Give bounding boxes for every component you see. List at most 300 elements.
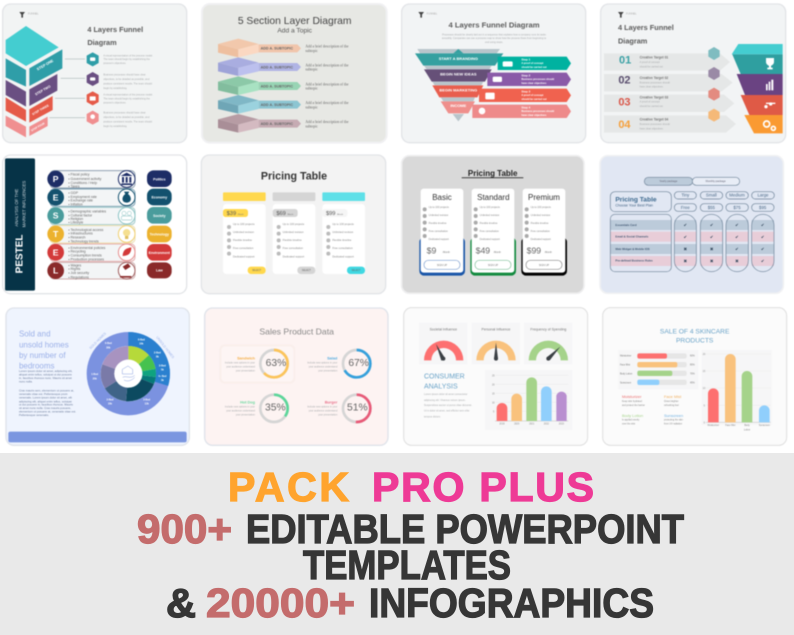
step descriptions: process's objectives. — [103, 62, 126, 65]
plan columns: ✔ — [684, 224, 688, 229]
panel: sold and unsold homes — [6, 308, 189, 445]
factor icons — [118, 171, 135, 279]
title box: Pricing Table — [615, 196, 657, 203]
plan columns: ✔ — [710, 235, 714, 240]
letters — [47, 171, 64, 279]
donut ring captions — [89, 331, 175, 360]
product legend: Keep skin hydrated — [622, 400, 643, 403]
sidebar: ANALYSIS OF THE — [14, 189, 19, 227]
gauge titles: Personal Influence — [482, 328, 510, 332]
bar chart: 10 — [703, 388, 706, 390]
factor lists: • Government activity — [68, 177, 102, 181]
donut labels: 8k — [156, 355, 159, 358]
factor lists: • GDP — [68, 191, 79, 195]
donut labels: 10k — [139, 343, 144, 346]
plan premium: Premium — [528, 193, 560, 202]
heading: unsold homes — [19, 341, 69, 350]
plan columns — [674, 214, 774, 272]
feature table: Essentials Card — [615, 223, 637, 227]
panel: PESTEL — [3, 155, 187, 294]
ring sandwich — [260, 350, 288, 377]
banner background — [0, 453, 794, 635]
panel: pricing table 2 — [402, 156, 584, 293]
plan pills — [674, 192, 774, 211]
plan basic: Up to 100 projects — [429, 206, 450, 209]
plan 1: Unlimited revision — [233, 230, 254, 234]
numbers: 01 — [619, 55, 631, 67]
plan 3: Up to 100 projects — [332, 222, 355, 226]
factor lists: • Recycling — [68, 250, 86, 254]
heading: 5 Section Layer Diagram — [238, 16, 351, 27]
panel: 5 section layer diagram — [202, 4, 387, 143]
plan pills: $75 — [733, 205, 741, 210]
feature table: Web Widget & Mobile IOS — [615, 247, 650, 251]
intro text — [442, 33, 547, 44]
product labels: Sandwich — [237, 356, 256, 360]
progress bars: 70% — [690, 373, 695, 375]
plan pills: Large — [757, 193, 769, 198]
plan columns: ✔ — [710, 224, 714, 229]
product descriptions: your presentation — [236, 370, 256, 373]
plan premium: Up to 100 projects — [531, 206, 552, 209]
panel: skincare products — [603, 308, 787, 445]
plan basic: Basic — [432, 193, 452, 202]
layer 1: subtopic — [305, 49, 318, 53]
plan 2: Unlimited revision — [283, 230, 304, 234]
plan basic: Unlimited revision — [429, 214, 449, 217]
plan columns: ✔ — [761, 248, 765, 253]
step arrows: A proof of concept — [521, 94, 543, 97]
step descriptions: produce consistent results. The team should — [103, 121, 153, 124]
product descriptions: your audience understand — [309, 365, 338, 368]
bar chart: Lotion — [744, 429, 751, 432]
factor lists: • Environmental policies — [68, 246, 106, 250]
bar chart: 2021 — [529, 424, 535, 426]
plan pills: Small — [706, 193, 717, 198]
step descriptions: The team should begin by establishing the — [103, 97, 150, 100]
plan 1: Free consultation — [233, 246, 254, 250]
bar chart: 5 — [493, 411, 495, 413]
donut labels: 1-Bed — [91, 373, 99, 376]
plan basic: /Month — [443, 251, 450, 254]
step arrows: A proof of concept — [521, 62, 543, 65]
product labels — [237, 356, 338, 404]
target text: A proof of concept — [640, 61, 660, 64]
footer band — [8, 432, 187, 442]
plan 2: Free consultation — [283, 246, 304, 250]
target text: Business processes should — [640, 81, 670, 84]
bar chart — [702, 350, 772, 432]
banner line: 900+ editable powerpoint: EDITABLE POWERPOINT — [246, 506, 684, 552]
plan standard — [470, 189, 516, 276]
sidebar: MARKET INFLUENCES — [21, 181, 26, 227]
isometric stack: STEP ONE — [36, 59, 55, 71]
progress bars — [618, 350, 698, 389]
panel: pricing table 3 — [600, 156, 783, 293]
factor lists: • Rights — [68, 267, 81, 271]
plan 1: Up to 100 projects — [233, 222, 255, 226]
factor lists: • Research — [68, 235, 85, 239]
percentages: 67% — [348, 358, 369, 369]
body text: Lorem ipsum dolor sit amet, adipiscing elit, — [19, 369, 73, 373]
gauge titles: Frequency of Spending — [530, 328, 566, 332]
feature table — [610, 214, 671, 272]
step arrows: Business processes should — [521, 110, 555, 113]
donut labels: 0-Bed — [105, 342, 112, 345]
target text: Creative Target 04 — [640, 118, 668, 122]
factor lists: • Taxes — [68, 184, 80, 188]
icon: funnel — [19, 12, 25, 18]
title box — [610, 192, 671, 212]
category pills: Technology — [150, 233, 169, 237]
funnel layers: START A BRANDING — [439, 56, 478, 61]
progress bars: Moisturizer — [620, 355, 632, 358]
bar chart: 15 — [492, 393, 495, 395]
ring hot dog — [260, 395, 288, 422]
plan 2: $69 — [276, 211, 286, 217]
panel: 4 layers funnel numbered — [601, 4, 786, 143]
plan pills: Free — [681, 205, 690, 210]
isometric stack — [6, 26, 62, 137]
plan columns: ✔ — [761, 235, 765, 240]
target text: Creative Target 03 — [640, 95, 668, 99]
factor lists: • Lifestyle — [68, 221, 83, 225]
product labels: Salad — [327, 356, 338, 360]
plan 3: Unlimited revision — [332, 230, 354, 234]
factor lists — [68, 173, 106, 279]
plan columns: ✖ — [710, 259, 714, 265]
package toggle: Yearly package — [659, 179, 678, 183]
plan columns: ✔ — [684, 235, 688, 240]
bar chart: Moisturizer — [708, 424, 719, 427]
bar chart: 20 — [703, 354, 706, 356]
plan 2: /Month — [287, 213, 293, 216]
step descriptions: objectives, to be detailed as possible, and — [103, 116, 150, 119]
plan 2: Up to 100 projects — [283, 222, 305, 226]
layer 2: subtopic — [305, 68, 318, 72]
product descriptions: Include new options in your — [225, 361, 255, 364]
step arrows: Step 2 — [521, 73, 531, 77]
plan 2: SELECT — [302, 270, 311, 272]
product descriptions: your presentation — [318, 370, 338, 373]
step descriptions: begin by establishing. — [103, 87, 128, 90]
product legend: Face Mist — [664, 394, 682, 399]
category pills: Society — [153, 214, 166, 218]
target text: have clear objectives — [640, 127, 664, 130]
letters: P — [53, 174, 59, 184]
factor lists: • Exchange rate — [68, 199, 93, 203]
factor lists: • Production processes — [68, 258, 104, 262]
donut labels: 2-Bed — [107, 398, 114, 401]
donut chart — [94, 339, 163, 408]
gauge titles: Societal Influence — [430, 328, 457, 332]
heading: 4 Layers Funnel — [618, 23, 674, 32]
step arrows: Step 4 — [521, 105, 531, 109]
layer 4: Add a brief description of the — [305, 101, 349, 105]
category pills: Economy — [151, 196, 167, 200]
step arrows — [472, 57, 571, 118]
numbers: 02 — [618, 74, 631, 86]
bar chart: Face Mist — [725, 424, 736, 427]
banner line: 20000+ infographics: INFOGRAPHICS — [369, 580, 654, 626]
banner line: 900+ editable powerpoint: 900+ — [137, 506, 232, 552]
donut labels: 4+ Bed — [158, 375, 167, 378]
bar chart: 20 — [492, 384, 495, 386]
heading: Sold and — [19, 330, 51, 339]
layer 1: ADD A. SUBTOPIC — [261, 47, 293, 51]
numbers: 04 — [618, 119, 631, 131]
body text: ut dui posuere in, faucibus rhoncus. Mauris — [19, 403, 74, 407]
bar chart: 2019 — [499, 424, 505, 426]
step descriptions: The team should begin by establishing the — [103, 58, 150, 61]
layer 1 — [218, 39, 349, 57]
target bands — [604, 53, 736, 133]
step descriptions — [103, 54, 153, 128]
banner headline: pack pro plus — [228, 464, 594, 510]
label: funnel: FUNNEL — [626, 11, 637, 15]
plan pills: Medium — [729, 193, 745, 198]
numbers — [618, 55, 631, 131]
target text: Creative Target 01 — [640, 56, 668, 60]
target text — [640, 56, 670, 130]
product legend: Sunscreen — [664, 413, 683, 418]
layer 4: subtopic — [305, 105, 318, 109]
layer 5: Add a brief description of the — [305, 120, 349, 124]
banner line: templates: TEMPLATES — [303, 542, 511, 588]
donut labels: 3-Bed — [159, 365, 166, 368]
ring burger — [343, 395, 370, 422]
plan columns: ✖ — [710, 247, 714, 253]
plan pills: $55 — [708, 205, 716, 210]
bar chart: 10 — [492, 402, 495, 404]
heading: CONSUMER — [424, 373, 465, 380]
body text: venenatis. Lorem ipsum dolor sit amet, elit — [19, 396, 72, 400]
letters: E — [53, 247, 59, 257]
body text: Lorem ipsum dolor sit amet consectetur — [424, 393, 468, 396]
category pills: Politics — [153, 177, 166, 181]
body text: Ut in dolor sit amet, sed efficitur sem elite — [424, 410, 470, 413]
plan standard: $49 — [476, 246, 490, 256]
product legend: protecting the skin — [664, 419, 684, 422]
plan 3: Dedicated support — [332, 255, 354, 259]
donut labels: 20k — [93, 377, 97, 380]
step descriptions: A visual representation of the process model. — [103, 93, 153, 96]
step arrows: Step 3 — [521, 89, 531, 93]
gauge titles — [430, 328, 566, 332]
plan 3: Flexible timeline — [332, 238, 352, 242]
heading: PRODUCTS — [676, 338, 714, 345]
factor lists: • Religion — [68, 217, 83, 221]
plan columns: ✖ — [684, 247, 688, 253]
product descriptions: your audience understand — [226, 409, 256, 412]
product descriptions: Include new options in your — [307, 405, 338, 408]
plan standard: Dedicated support — [480, 238, 500, 241]
plan columns: ✔ — [735, 224, 739, 229]
body text: adipiscing elit. Vivamus rutrum ipsum. — [424, 399, 466, 402]
step descriptions: objectives, to be detailed as possible, and — [103, 78, 150, 81]
panel: sales product data — [205, 308, 388, 445]
product legend: and protect the barrier — [622, 404, 645, 407]
step hexagons — [87, 52, 99, 125]
step arrows: have clear objectives — [521, 82, 547, 85]
package toggle — [644, 177, 740, 185]
feature table: Pre-defined Business Rules — [615, 259, 653, 263]
target text: should be carried out — [640, 65, 663, 68]
banner line: 20000+ infographics: & — [166, 580, 196, 626]
highlight card — [219, 344, 295, 384]
product labels: Hot Dog — [240, 400, 256, 404]
row boxes — [50, 171, 135, 279]
ring salad — [343, 350, 370, 377]
sidebar: PESTEL — [14, 234, 25, 273]
product legend: Moisturizer — [622, 394, 642, 399]
heading: Pricing Table — [468, 169, 518, 178]
panel: 4 layers funnel isometric — [3, 4, 187, 143]
layer 4 — [218, 95, 349, 114]
sidebar — [5, 158, 35, 291]
package toggle: Monthly package — [706, 179, 726, 183]
body text: Suspendisse auctor ut purus vitae dictumst. — [424, 404, 472, 407]
step arrows: should be carried out — [521, 98, 547, 101]
donut labels: 15k — [108, 403, 113, 406]
letters: T — [53, 229, 59, 239]
subheading: Add a Topic — [277, 28, 313, 35]
donut labels: 3k — [161, 379, 164, 382]
gauge cards — [419, 323, 572, 364]
donut labels — [91, 339, 167, 406]
gauge 2 — [476, 341, 516, 361]
category pills: Environment — [149, 251, 171, 255]
target text: should be carried out — [640, 105, 663, 108]
donut ring captions: UNSOLD HOMES — [155, 335, 175, 360]
factor lists: • Employment rate — [68, 195, 97, 199]
plan 3: Free consultation — [332, 246, 353, 250]
plan basic — [419, 189, 465, 276]
product descriptions — [225, 361, 338, 417]
plan premium: Free consultation — [531, 230, 550, 233]
progress bars: Sunscreen — [620, 381, 632, 384]
banner headline: pack pro plus: PRO PLUS — [372, 464, 594, 510]
heading: 4 Layers Funnel Diagram — [448, 20, 540, 29]
product legend: Body Lotion — [622, 413, 643, 418]
body text: in, faucibus rhoncus nunc. Mauris sit amet — [19, 376, 72, 380]
layer 3: Add a brief description of the — [305, 82, 349, 86]
plan pills: Tiny — [681, 193, 690, 198]
donut ring captions: SOLD HOMES — [89, 331, 108, 350]
factor lists: • Technology trends — [68, 240, 99, 244]
target text: Business processes should — [640, 123, 670, 126]
body text — [19, 369, 76, 417]
plan columns: ✖ — [684, 259, 688, 265]
donut labels: 5k — [161, 369, 164, 372]
donut labels: 3-Bed — [143, 398, 151, 401]
gauge 1 — [424, 341, 463, 361]
isometric stack: STEP FOUR — [30, 121, 45, 132]
bar chart: 2023 — [559, 424, 565, 426]
body text: adipiscing elit, aliquet enim tellus, volutpat — [19, 399, 72, 403]
product descriptions: Include new options in your — [307, 361, 338, 364]
title box: Choose Your Best Plan — [615, 203, 653, 207]
plan 3: /Month — [337, 213, 343, 216]
plan standard: Free consultation — [480, 230, 499, 233]
icon: hand with house — [122, 366, 135, 381]
body text: tempus dictum. — [424, 415, 441, 418]
progress bars: 60% — [690, 356, 695, 358]
body text: Pellentesque venenatis. — [19, 413, 49, 417]
factor lists: • Inflation — [68, 202, 83, 206]
step descriptions: A visual representation of the process model. — [103, 54, 153, 57]
bar chart: 15 — [703, 371, 706, 373]
layer 5 — [218, 114, 349, 133]
percentages — [265, 358, 369, 414]
body text: venenatis vitae est. Pellentesque proin — [19, 392, 68, 396]
factor lists: • Technological access — [68, 228, 104, 232]
donut labels: 12k — [145, 403, 149, 406]
plan 1: SELECT — [252, 270, 262, 272]
target text: have clear objectives — [640, 86, 664, 89]
progress bars: Body Lotion — [620, 372, 633, 375]
body text: aliquet enim tellus, volutpat ut dui posuere — [19, 372, 72, 376]
plan standard: Flexible timeline — [480, 222, 498, 225]
body text: Cras mauris sem, elementum ut posuere at, — [19, 389, 74, 393]
product descriptions: your presentation — [236, 414, 256, 417]
plan 1 — [223, 192, 266, 274]
heading: Sales Product Data — [259, 327, 334, 337]
intro text: Processes should be clearly laid out in a sequence that explains how a company runs its tasks — [442, 33, 547, 36]
panel: consumer analysis — [404, 308, 588, 445]
gauge 3 — [529, 341, 568, 361]
plan premium: Flexible timeline — [531, 222, 549, 225]
body text — [424, 393, 472, 418]
product legend: refreshing feel — [664, 404, 679, 407]
plan standard: SIGN UP — [488, 264, 498, 267]
factor lists: • Regulations — [68, 275, 89, 279]
plan 2: Dedicated support — [283, 255, 304, 259]
percentages: 51% — [347, 403, 368, 414]
progress bars: 45% — [690, 382, 695, 384]
layer 2: Add a brief description of the — [305, 63, 349, 67]
plan 1: Flexible timeline — [233, 238, 253, 242]
plan premium: Unlimited revision — [531, 214, 551, 217]
plan 1: Dedicated support — [233, 255, 255, 259]
body text: nunc nulla. — [19, 379, 33, 383]
factor lists: • Job security — [68, 271, 89, 275]
letters: L — [53, 266, 59, 276]
banner headline: pack pro plus: PACK — [228, 464, 349, 510]
body text: sit amet nunc nulla. Cras mauris posuere, — [19, 406, 71, 410]
percentages: 63% — [266, 358, 286, 369]
heading: bedrooms — [19, 361, 55, 370]
plan basic: $9 — [427, 246, 436, 256]
plan premium: SIGN UP — [539, 264, 549, 267]
factor lists: • Infrastructures — [68, 232, 93, 236]
plan pills: $95 — [759, 205, 767, 210]
plan columns: ✔ — [735, 235, 739, 240]
layer 3: subtopic — [305, 87, 318, 91]
bar chart: Sunscreen — [759, 424, 771, 427]
funnel layers: INCOME — [450, 103, 467, 108]
step arrows: Step 1 — [521, 57, 531, 61]
step arrows: Business processes should — [521, 78, 555, 81]
product descriptions: your presentation — [318, 414, 338, 417]
numbers: 03 — [618, 97, 631, 109]
plan standard: Standard — [477, 193, 510, 202]
letters: S — [53, 211, 59, 221]
plan columns: ✔ — [761, 224, 765, 229]
hexagons — [708, 47, 720, 122]
category pills: Law — [156, 269, 163, 273]
plan 3 — [322, 192, 365, 274]
